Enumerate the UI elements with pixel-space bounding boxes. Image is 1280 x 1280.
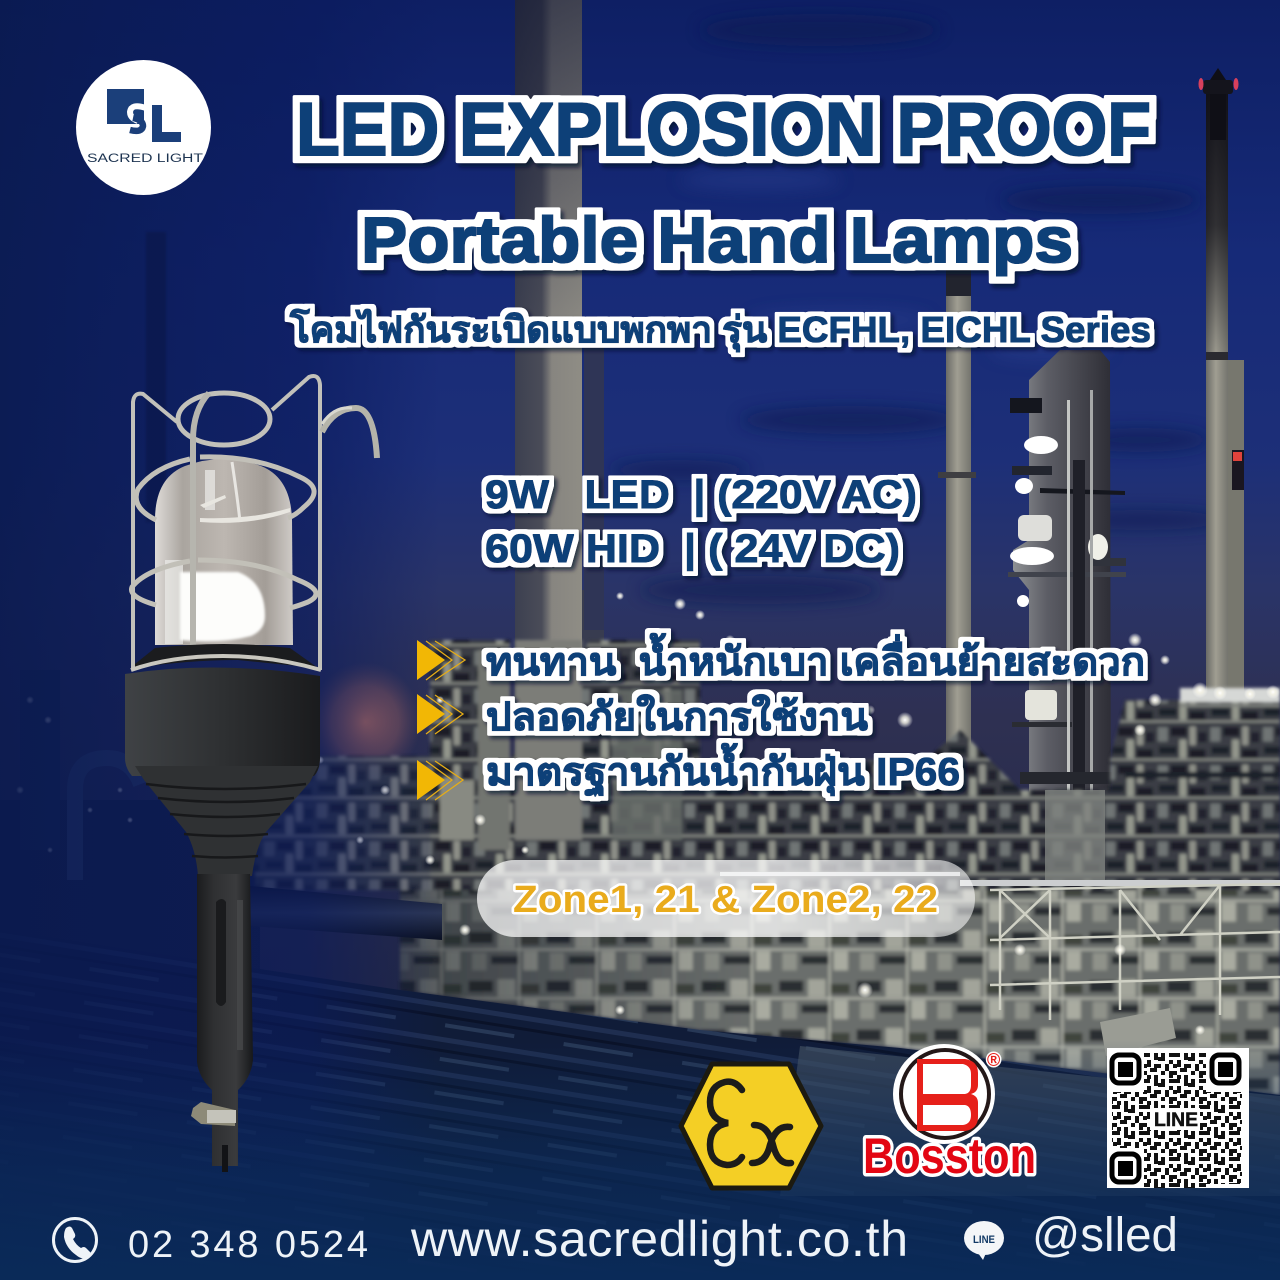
blurred plant structures [255,640,1280,1095]
subtitle: Portable Hand Lamps [361,204,1073,276]
hand lamp product photo [125,376,377,1172]
plant section mid-left [255,756,430,890]
feature 3: มาตรฐานกันน้ำกันฝุ่น IP66 [486,743,960,797]
clouds [610,14,1230,604]
zone text: Zone1, 21 & Zone2, 22 [513,879,938,921]
lights [16,592,1280,1035]
central chimney [515,0,582,880]
distillation column [1008,350,1126,892]
LINE handle: @slled [1032,1209,1178,1262]
arrow bullet 2 [417,694,463,734]
lamp hose clamp [191,1102,235,1126]
zone pill [477,860,975,937]
second chimney [946,270,971,750]
feature list [417,633,1145,800]
spec LED: 9W LED | (220V AC) [485,473,917,517]
Bosston emblem [893,1044,995,1144]
lamp front bar [193,393,209,658]
lamp handle [197,874,253,1166]
right chimney [1206,90,1228,710]
Bosston wordmark: Bosston [863,1128,1036,1184]
QR modules [1112,1053,1242,1188]
lamp rings [132,457,316,608]
registered mark: ® [987,1050,1000,1070]
lamp cord [222,1145,228,1172]
arrow bullet 1 [417,640,465,680]
footer contacts [54,1209,1178,1267]
lamp body [125,667,320,776]
feature 1: ทนทาน น้ำหนักเบา เคลื่อนย้ายสะดวก [486,633,1145,684]
plant section centre [430,640,940,900]
grey cylinder [1100,1008,1176,1056]
logo name: SACRED LIGHT [87,153,203,165]
Ex certification mark [681,1064,821,1188]
elbow pipe [75,758,141,880]
Bosston brand logo [863,1044,1036,1184]
dark insulated pipe [250,886,442,940]
dark pipe yard [0,930,1280,1280]
LINE icon [964,1221,1004,1260]
arrow bullet 3 [417,760,463,800]
phone number: 02 348 0524 [128,1224,368,1266]
lamp base collar [135,644,318,668]
lamp hook [322,408,377,458]
plant section right [925,688,1280,900]
QR LINE label: LINE [1154,1110,1198,1131]
lit pipework section [400,890,1280,1095]
Thai product line: โคมไฟกันระเบิดแบบพกพา รุ่น ECFHL, EICHL Series [289,308,1151,353]
lamp glass dome [155,459,293,645]
website: www.sacredlight.co.th [410,1211,908,1267]
title: LED EXPLOSION PROOF [296,87,1151,171]
QR finder patterns [1112,1055,1239,1182]
phone icon [54,1218,96,1262]
LINE icon: LINE [973,1234,995,1246]
lamp bottom ring [131,656,321,670]
Ex glyph [710,1082,791,1165]
lamp cage back wires [133,376,320,670]
spec HID: 60W HID | ( 24V DC) [485,527,900,571]
dark overlays [0,0,440,1280]
specifications [485,473,917,571]
left stack shadow [146,232,166,522]
horizon glow [309,662,421,782]
feature 2: ปลอดภัยในการใช้งาน [486,694,868,739]
beacon [1232,450,1244,490]
left silhouettes [0,800,260,1260]
LINE QR code [1107,1048,1249,1188]
tanks [478,650,510,850]
lamp cone [135,766,318,876]
logo mark [107,89,181,142]
logo: Sacred Light [76,60,211,195]
